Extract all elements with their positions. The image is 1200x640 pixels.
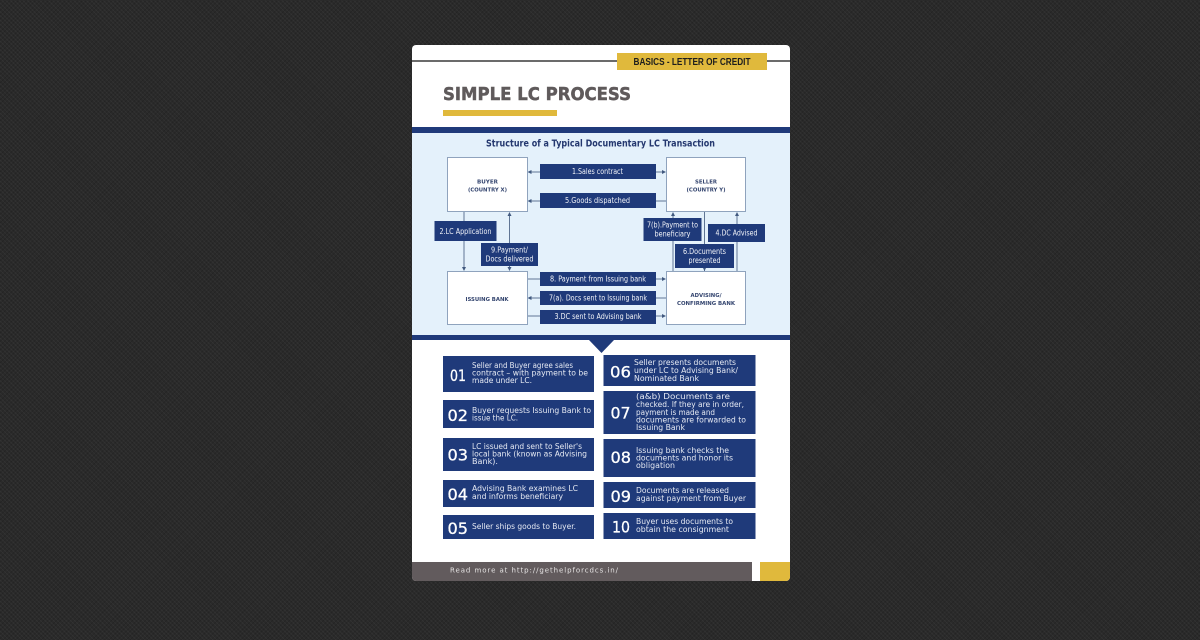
footer bar: Read more at http://gethelpforcdcs.in/ xyxy=(450,566,619,574)
step 09: Documents are released xyxy=(636,486,729,495)
label: 9: 9.Payment/ xyxy=(491,246,528,254)
title underline xyxy=(443,110,557,116)
label: 7b xyxy=(644,218,702,241)
box: buyer xyxy=(448,158,528,212)
step 09: 09 xyxy=(610,487,631,506)
label: 4 xyxy=(708,224,765,242)
box: issuing bank xyxy=(448,272,528,324)
step 07: documents are forwarded to xyxy=(636,416,746,424)
step 01: made under LC. xyxy=(472,376,532,385)
step 03: 03 xyxy=(448,446,468,464)
label: 9 xyxy=(481,243,538,266)
box: issuing bank: ISSUING BANK xyxy=(466,297,509,303)
step 10: 10 xyxy=(612,518,630,536)
label: 9: Docs delivered xyxy=(486,254,534,264)
step 05: Seller ships goods to Buyer. xyxy=(472,522,576,531)
step 08: Issuing bank checks the xyxy=(636,446,729,455)
step 03: Bank). xyxy=(472,457,498,466)
step 01: contract – with payment to be xyxy=(472,368,588,378)
step 07: Issuing Bank xyxy=(636,423,686,432)
step 01: 01 xyxy=(450,366,466,385)
label: 7a: 7(a). Docs sent to Issuing bank xyxy=(549,294,647,302)
step 01: Seller and Buyer agree sales xyxy=(472,361,573,370)
step 03: local bank (known as Advising xyxy=(472,450,587,458)
step 04 xyxy=(443,480,594,507)
step 04: 04 xyxy=(448,485,468,504)
step 07: checked. If they are in order, xyxy=(636,400,744,409)
footer accent xyxy=(760,562,790,581)
panel: diagram xyxy=(412,127,790,340)
step 02 xyxy=(443,400,594,428)
step 03 xyxy=(443,438,594,471)
label: 8: 8. Payment from Issuing bank xyxy=(550,274,646,284)
step 07: (a&b) Documents are xyxy=(636,392,730,401)
label: 3: 3.DC sent to Advising bank xyxy=(554,312,642,321)
step 01 xyxy=(443,356,594,392)
step 02: 02 xyxy=(448,406,468,425)
step 08: documents and honor its xyxy=(636,454,733,462)
label: 2: 2.LC Application xyxy=(440,227,492,236)
label: 8 xyxy=(540,272,656,286)
connector lines xyxy=(462,170,739,318)
label: 5: 5.Goods dispatched xyxy=(565,196,630,205)
step 03: LC issued and sent to Seller's xyxy=(472,442,582,451)
step 08: obligation xyxy=(636,461,675,470)
step 10: obtain the consignment xyxy=(636,525,729,534)
box: advising bank xyxy=(666,272,746,324)
step 07 xyxy=(604,391,756,434)
step 04: and informs beneficiary xyxy=(472,492,563,501)
step 06: 06 xyxy=(610,362,631,382)
box: buyer: BUYER xyxy=(477,180,499,186)
infographic card xyxy=(412,45,790,581)
step 09: against payment from Buyer xyxy=(636,494,747,503)
step 04: Advising Bank examines LC xyxy=(472,484,578,493)
box: seller xyxy=(666,158,746,212)
step 06: Seller presents documents xyxy=(634,358,736,367)
step 07: payment is made and xyxy=(636,408,715,417)
label: 7b: beneficiary xyxy=(654,230,691,238)
step 08: 08 xyxy=(610,448,631,467)
step 06: Nominated Bank xyxy=(634,374,700,383)
header rule xyxy=(412,60,790,62)
box: seller: (COUNTRY Y) xyxy=(686,188,726,194)
pointer triangle xyxy=(589,340,614,353)
label: 1 xyxy=(540,164,656,179)
step 02: issue the LC. xyxy=(472,414,518,422)
label: 6: presented xyxy=(688,256,721,265)
label: 7b: 7(b).Payment to xyxy=(647,220,698,230)
box: seller: SELLER xyxy=(695,180,718,186)
title: SIMPLE LC PROCESS xyxy=(443,84,631,105)
label: 5 xyxy=(540,193,656,208)
step 05 xyxy=(443,515,594,539)
header tag: BASICS - LETTER OF CREDIT xyxy=(634,57,750,68)
label: 3 xyxy=(540,310,656,324)
step 02: Buyer requests Issuing Bank to xyxy=(472,406,591,415)
step 08 xyxy=(604,439,756,477)
box: buyer: (COUNTRY X) xyxy=(468,188,507,194)
label: 7a xyxy=(540,291,656,305)
header tag xyxy=(617,53,767,70)
footer bar xyxy=(412,562,752,581)
label: 2 xyxy=(434,221,496,241)
box: advising bank: CONFIRMING BANK xyxy=(677,301,736,307)
step 05: 05 xyxy=(448,519,468,538)
step 09 xyxy=(604,482,756,508)
label: 6 xyxy=(675,244,734,268)
label: 6: 6.Documents xyxy=(683,247,726,256)
step 06: under LC to Advising Bank/ xyxy=(634,366,738,375)
step 10: Buyer uses documents to xyxy=(636,517,733,526)
diagram heading: Structure of a Typical Documentary LC Transaction xyxy=(486,138,715,150)
step 06 xyxy=(604,355,756,386)
step 10 xyxy=(604,513,756,539)
box: advising bank: ADVISING/ xyxy=(690,293,722,299)
step 07: 07 xyxy=(610,404,630,422)
label: 4: 4.DC Advised xyxy=(716,228,758,238)
label: 1: 1.Sales contract xyxy=(572,167,623,176)
